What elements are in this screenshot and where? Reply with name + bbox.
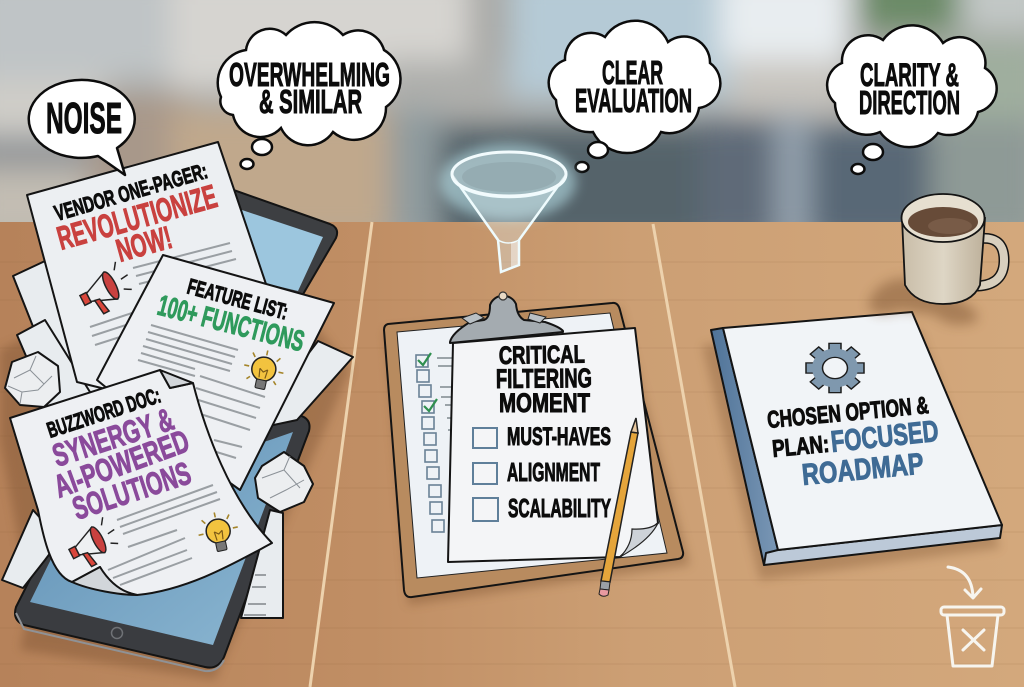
x mark [963, 630, 984, 650]
heading: roadmap: ROADMAP [801, 447, 925, 492]
icon: gear [806, 343, 864, 393]
label: evaluation: EVALUATION [575, 82, 692, 119]
checklist lines [437, 358, 452, 430]
mug shadow [868, 278, 978, 325]
text lines [138, 325, 265, 458]
label: clear: CLEAR [602, 54, 663, 91]
heading: now: NOW! [112, 219, 176, 269]
icon: pencil [599, 418, 638, 596]
bin lid [941, 607, 1004, 615]
heading: synergy: SYNERGY & [48, 401, 178, 474]
icon: red megaphone [74, 260, 138, 320]
book shadow [702, 330, 1000, 580]
mug body [902, 218, 985, 304]
thought dots [240, 139, 272, 169]
thought dots [576, 142, 608, 172]
loose sheet lines [244, 575, 266, 615]
heading: ai-powered: AI-POWERED [49, 423, 194, 505]
heading: critical filtering moment: CRITICAL [499, 341, 585, 370]
option: scalability [473, 493, 611, 523]
coffee [908, 207, 978, 237]
text lines [90, 243, 236, 345]
option: scalability: SCALABILITY [508, 493, 611, 523]
arrow into bin [948, 567, 981, 598]
thought cloud: overwhelming and similar [218, 22, 400, 169]
option: must-haves: MUST-HAVES [507, 423, 611, 451]
noise stack of documents and tablets [0, 142, 353, 680]
text lines [108, 485, 220, 585]
icon: trash bin with arrow [941, 567, 1004, 666]
wooden desk [0, 222, 1024, 687]
page curl [620, 523, 658, 557]
loose paper sheets behind [2, 254, 353, 618]
heading: revolutionize: REVOLUTIONIZE [53, 177, 221, 257]
document: buzzword doc [10, 370, 272, 595]
blurred office background [0, 0, 1024, 222]
heading: critical filtering moment [496, 341, 592, 418]
metal clip [450, 292, 563, 343]
option: must-haves [473, 423, 611, 451]
icon: light bulb [240, 346, 287, 393]
label: overwhelming: OVERWHELMING [229, 56, 390, 93]
option: alignment: ALIGNMENT [507, 457, 600, 487]
document: vendor one-pager [27, 142, 268, 400]
icon: crumpled paper ball right [255, 452, 313, 512]
heading: 100+ functions: 100+ FUNCTIONS [154, 290, 307, 358]
green check marks [418, 353, 437, 411]
back checklist sheet [397, 313, 667, 578]
mug handle [970, 238, 1004, 286]
heading: focused: FOCUSED [829, 415, 940, 459]
speech bubble: noise [29, 80, 135, 175]
icon: light bulb [195, 508, 242, 555]
bin body [947, 615, 998, 666]
icon: crumpled paper ball left [5, 352, 60, 407]
thought cloud: clarity and direction [827, 25, 997, 174]
thought dots [852, 144, 883, 174]
heading: chosen option and plan: CHOSEN OPTION & [766, 392, 930, 434]
heading: vendor one-pager: VENDOR ONE-PAGER: [51, 158, 210, 226]
heading: plan: PLAN: [771, 431, 830, 463]
roadmap book [702, 312, 1002, 580]
icon: glass funnel [440, 144, 576, 272]
label: noise: NOISE [46, 94, 122, 143]
book pages edge [764, 525, 1002, 565]
heading: feature list: FEATURE LIST: [185, 274, 291, 324]
heading: critical filtering moment: MOMENT [499, 388, 590, 418]
label: similar: & SIMILAR [259, 83, 362, 120]
checkboxes [416, 355, 444, 532]
clipboard with checklist [384, 292, 690, 605]
book spine [711, 328, 778, 565]
heading: critical filtering moment: FILTERING [496, 363, 592, 394]
heading: solutions: SOLUTIONS [68, 455, 195, 527]
thought cloud: clear evaluation [549, 21, 720, 172]
clipboard shadow [385, 308, 690, 605]
coffee mug [868, 194, 1004, 325]
icon: tablet behind documents [225, 188, 337, 296]
clipboard board [384, 303, 683, 597]
desk shadows under the stack [0, 240, 350, 680]
icon: red megaphone [63, 515, 125, 572]
book cover [723, 312, 1002, 550]
option: alignment [473, 457, 600, 487]
document: feature list [97, 255, 334, 490]
heading: buzzword doc: BUZZWORD DOC: [44, 383, 164, 443]
front sheet [448, 328, 658, 562]
icon: tablet under documents [15, 413, 310, 671]
